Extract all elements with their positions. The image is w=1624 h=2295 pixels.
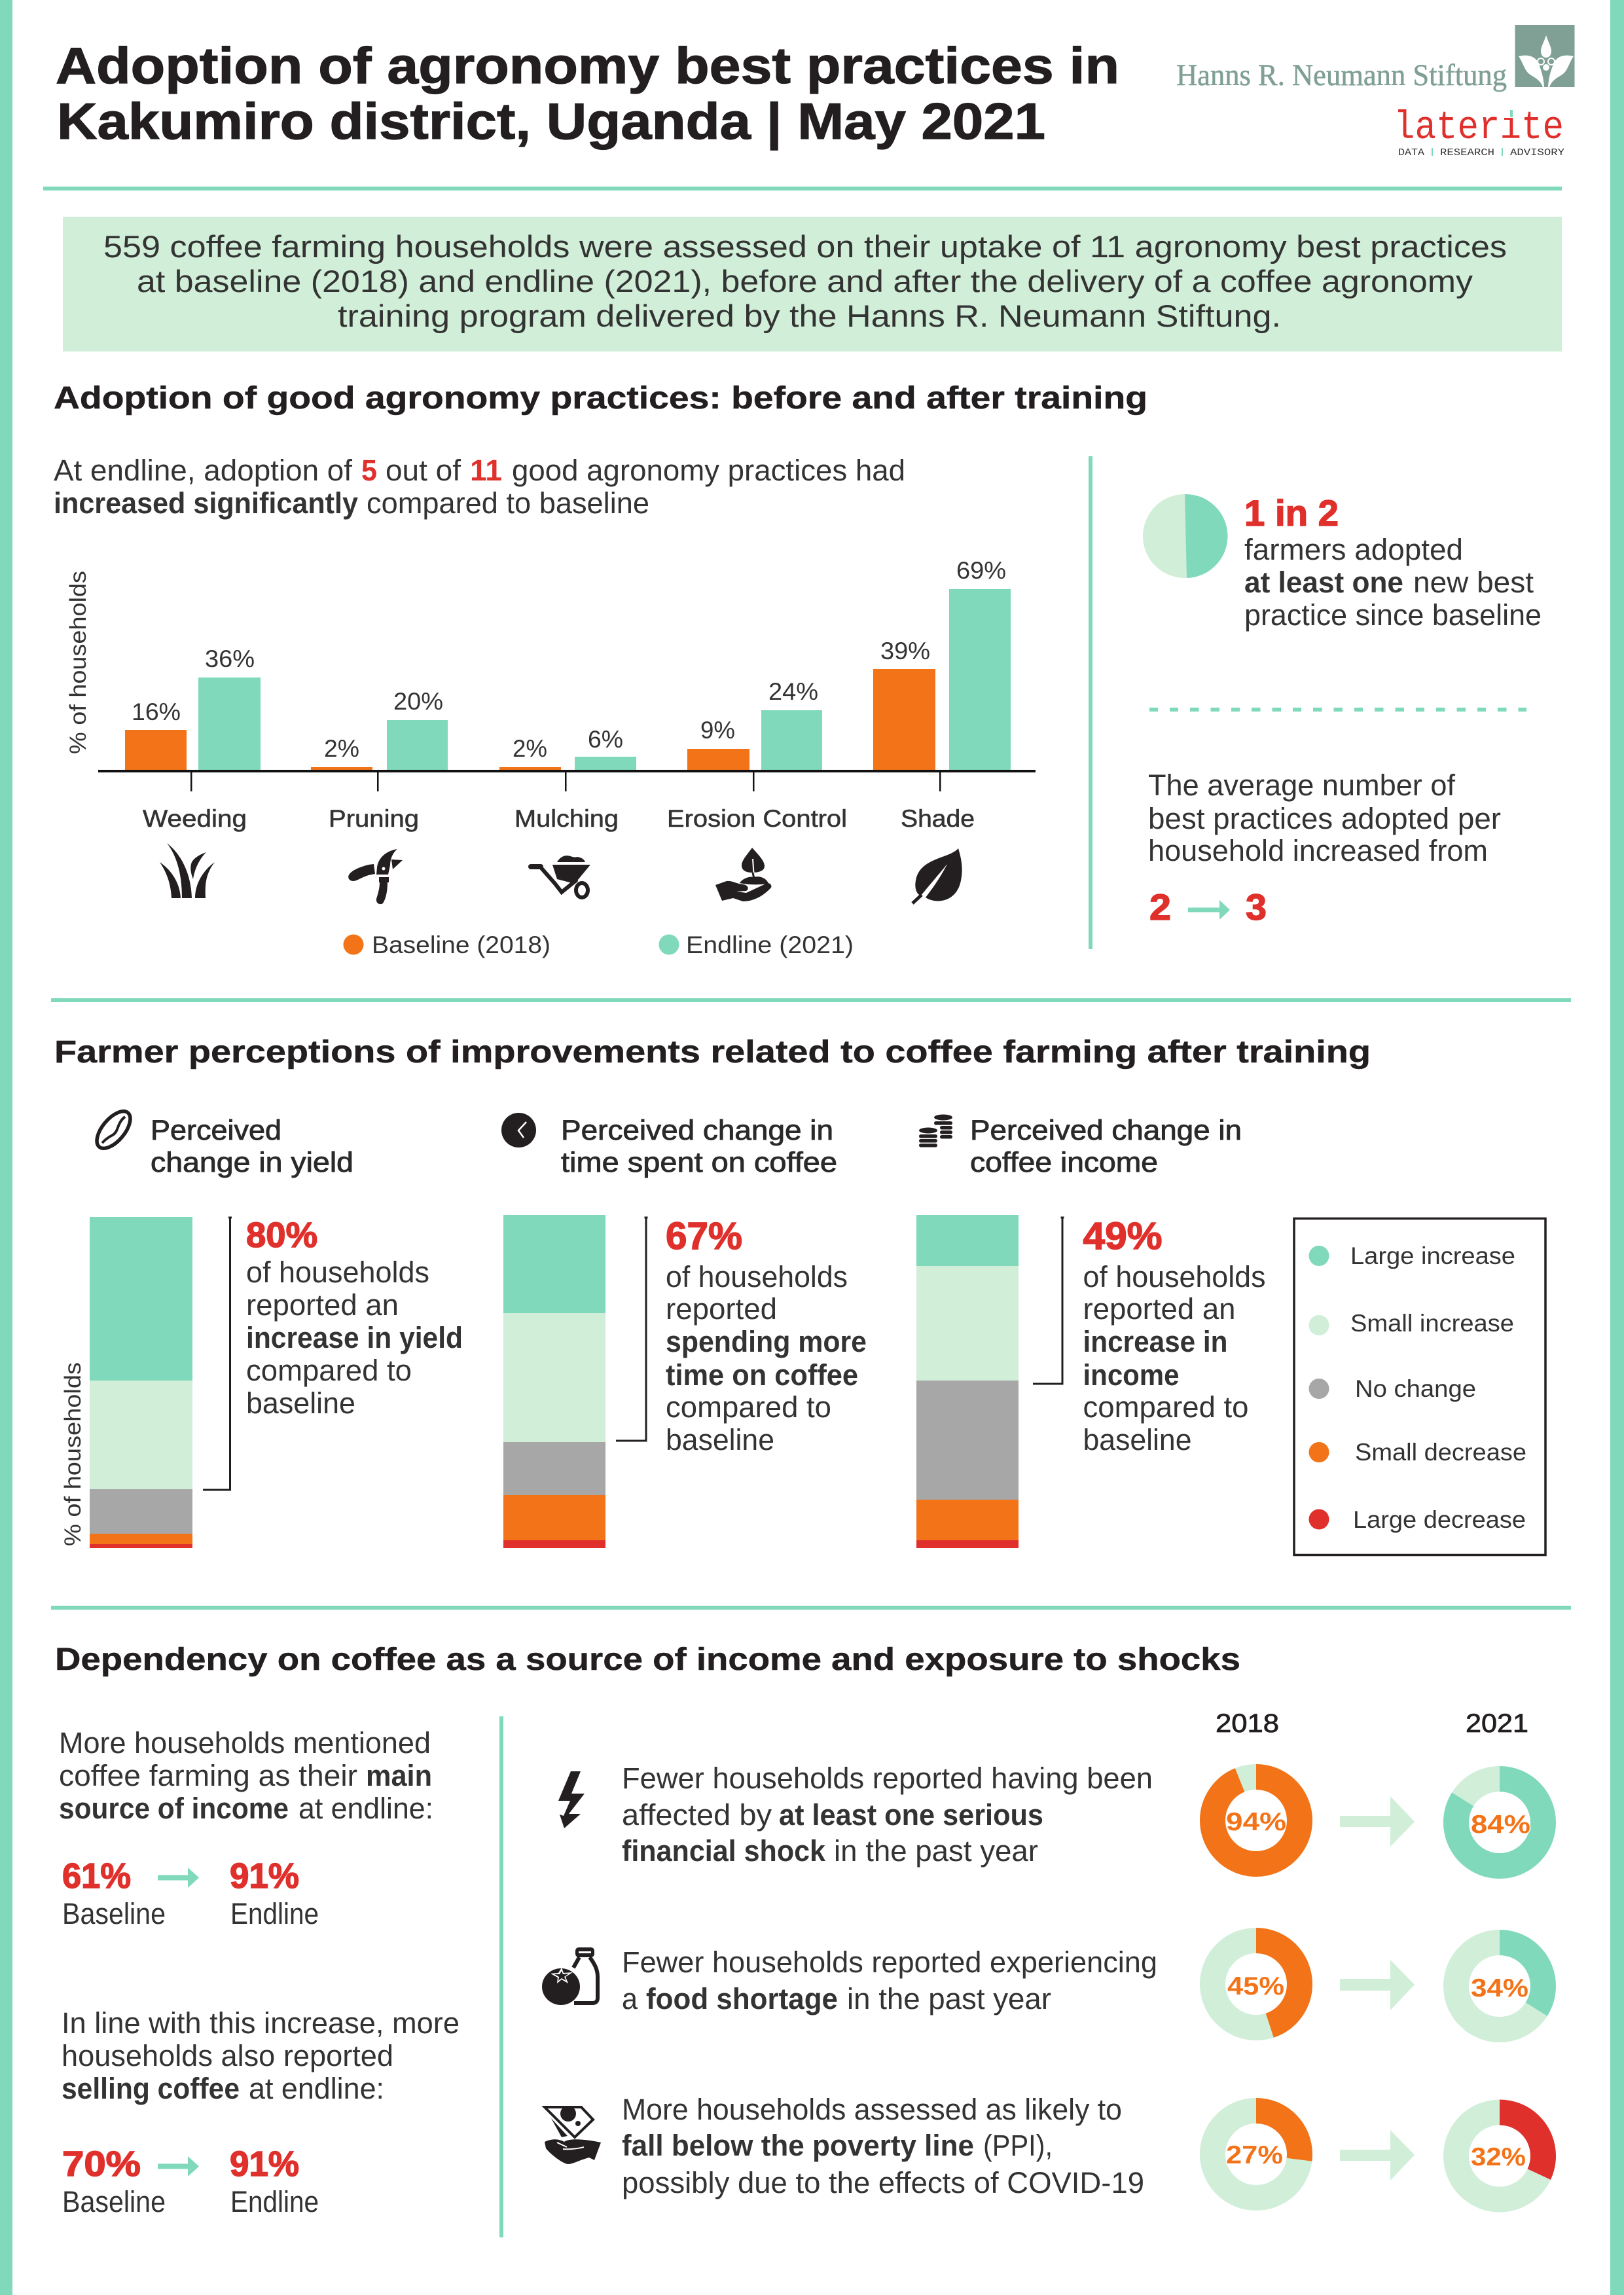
callout: 67% — [666, 1215, 867, 1456]
callout: 49%: baseline — [1083, 1423, 1191, 1456]
text block: possibly due to the effects of COVID-19 — [622, 2166, 1144, 2199]
panel: average number of best practices: 3 — [1246, 886, 1267, 928]
panel: main source of income: coffee farming as their — [59, 1759, 357, 1792]
subheading — [151, 1115, 353, 1178]
legend: baseline and endline — [343, 931, 854, 958]
text block: in the past year — [847, 1982, 1051, 2015]
icon: coins — [919, 1114, 952, 1147]
panel: average number of best practices — [1148, 768, 1501, 928]
bars: erosion control: 24% — [768, 678, 818, 705]
row: food shortage — [542, 1940, 1543, 2029]
logo: laterite: RESEARCH — [1440, 147, 1494, 158]
text block: fall below the poverty line — [622, 2129, 974, 2162]
callout: 80%: 80% — [246, 1216, 317, 1255]
pie chart — [1143, 494, 1227, 578]
panel: main source of income: More households mentioned — [59, 1726, 431, 1760]
panel: selling coffee: In line with this increase, more — [62, 2006, 460, 2040]
panel: main source of income — [59, 1726, 433, 1930]
icon: grass — [160, 843, 215, 898]
legend: baseline and endline: Baseline (2018) — [372, 931, 550, 958]
text block: Fewer households reported having been — [622, 1762, 1153, 1795]
callout: 67%: spending more — [666, 1325, 867, 1358]
callout: 80%: reported an — [246, 1288, 399, 1322]
title: Kakumiro district, Uganda | May 2021 — [57, 92, 1045, 150]
logo: laterite: DATA — [1398, 147, 1424, 158]
donut: 2021 84% — [1456, 1779, 1543, 1866]
legend: perceived change: Small increase — [1350, 1310, 1514, 1337]
panel: perceived change in time spent — [501, 1113, 867, 1548]
panel: 1 in 2 farmers: at least one — [1244, 566, 1403, 599]
stacked bar — [916, 1215, 1019, 1548]
icon: pruning shears — [348, 849, 403, 904]
donut: 2018 27% — [1212, 2110, 1300, 2198]
heading: adoption of good agronomy practices: Adoption of good agronomy practices: before and after training — [54, 381, 1147, 416]
row: poverty line — [545, 2093, 1543, 2199]
subheading: change in yield — [151, 1147, 353, 1178]
subheading: Perceived — [151, 1115, 281, 1146]
panel: 1 in 2 farmers: farmers adopted — [1244, 533, 1463, 566]
bars: weeding: 16% — [132, 698, 181, 725]
panel: selling coffee: selling coffee — [62, 2072, 240, 2105]
stacked bar — [503, 1215, 605, 1548]
donut: 2018 94%: 94% — [1226, 1808, 1286, 1836]
panel: main source of income: 61% — [62, 1856, 131, 1896]
panel: main source of income: source of income — [59, 1792, 289, 1825]
arrow — [1340, 1960, 1415, 2010]
donut: 2021 34%: 34% — [1471, 1974, 1528, 2002]
donut: 2018 45%: 45% — [1227, 1972, 1284, 2000]
heading: farmer perceptions: Farmer perceptions of improvements related to coffee farming after training — [54, 1035, 1371, 1070]
bars: shade: 69% — [956, 557, 1006, 584]
panel: perceived change in yield — [60, 1106, 463, 1548]
callout: 49%: reported an — [1083, 1292, 1236, 1326]
bars: shade: 39% — [880, 638, 930, 664]
text block: adoption summary: out of — [386, 454, 461, 487]
panel: selling coffee: at endline: — [249, 2072, 384, 2105]
icon: clock — [501, 1113, 536, 1148]
intro panel: at baseline (2018) and endline (2021), before and after the delivery of a coffee agronomy — [137, 264, 1473, 298]
intro panel — [63, 217, 1562, 352]
bars: weeding: 36% — [205, 645, 255, 672]
legend: perceived change: Small decrease — [1355, 1439, 1526, 1466]
year headings — [1216, 1709, 1528, 1738]
bracket — [203, 1218, 232, 1490]
text block: at least one serious — [779, 1798, 1043, 1832]
donut: 2021 32% — [1456, 2112, 1543, 2199]
text block: adoption summary: compared to baseline — [367, 486, 649, 520]
bars: erosion control — [687, 678, 822, 771]
donut: 2021 84%: 84% — [1471, 1811, 1530, 1839]
panel: selling coffee: Endline — [230, 2185, 319, 2218]
panel: selling coffee: households also reported — [62, 2039, 393, 2072]
bars: erosion control: 9% — [700, 717, 735, 744]
arrow — [158, 2156, 199, 2177]
stacked bar — [90, 1217, 192, 1548]
text block: More households assessed as likely to — [622, 2093, 1122, 2126]
panel: average number of best practices: best practices adopted per — [1148, 802, 1501, 835]
callout: 80%: of households — [246, 1256, 429, 1289]
panel: 1 in 2 farmers — [1143, 492, 1542, 632]
callout: 80%: baseline — [246, 1386, 355, 1420]
text block: (PPI), — [983, 2129, 1053, 2162]
icon: hand receiving money — [545, 2106, 601, 2164]
category labels: Shade — [901, 805, 975, 832]
legend: perceived change — [1294, 1219, 1545, 1555]
callout: 80%: increase in yield — [246, 1321, 463, 1354]
category labels: Weeding — [143, 805, 247, 832]
text block: adoption summary — [54, 454, 905, 520]
text block: adoption summary: 5 — [361, 454, 377, 487]
text block: adoption summary: At endline, adoption of — [54, 454, 352, 487]
bracket — [616, 1218, 648, 1441]
callout: 67%: compared to — [666, 1390, 831, 1424]
panel: 1 in 2 farmers: new best — [1413, 566, 1534, 599]
panel: selling coffee: 70% — [62, 2144, 141, 2184]
subheading — [561, 1115, 837, 1178]
callout: 49%: of households — [1083, 1260, 1266, 1293]
legend: perceived change: Large increase — [1350, 1242, 1515, 1269]
donut: 2021 34% — [1456, 1943, 1543, 2029]
arrow — [1188, 900, 1230, 920]
year headings: 2021 — [1466, 1709, 1528, 1738]
subheading: coffee income — [970, 1147, 1158, 1178]
bars: mulching: 6% — [588, 726, 623, 753]
bars: mulching — [499, 726, 636, 771]
callout: 80% — [246, 1216, 463, 1420]
arrow — [158, 1868, 199, 1888]
year headings: 2018 — [1216, 1709, 1279, 1738]
callout: 67%: of households — [666, 1260, 848, 1293]
panel: main source of income: Endline — [230, 1897, 319, 1930]
callout: 67%: time on coffee — [666, 1358, 858, 1392]
logo: laterite: ADVISORY — [1510, 147, 1564, 158]
callout: 67%: reported — [666, 1292, 777, 1326]
subheading — [970, 1115, 1242, 1178]
panel: main source of income: main — [366, 1759, 432, 1792]
donut: 2018 94% — [1212, 1777, 1300, 1864]
y-axis label: % of households — [65, 571, 91, 754]
panel: perceived change in income — [916, 1114, 1266, 1548]
category labels: Mulching — [514, 805, 619, 832]
text block — [622, 1945, 1157, 2015]
row: financial shock — [558, 1762, 1543, 1868]
callout: 67%: 67% — [666, 1215, 742, 1257]
bars: shade — [873, 557, 1011, 771]
donut: 2021 32%: 32% — [1471, 2143, 1526, 2171]
panel: selling coffee — [62, 2006, 460, 2218]
callout: 49%: 49% — [1083, 1215, 1163, 1257]
panel: 1 in 2 farmers: 1 in 2 — [1244, 492, 1339, 533]
category labels — [143, 805, 975, 832]
bars: pruning — [311, 688, 448, 771]
panel: main source of income: Baseline — [62, 1897, 166, 1930]
category labels: Erosion Control — [667, 805, 847, 832]
bars: pruning: 2% — [324, 735, 359, 762]
logo: laterite: laterite — [1394, 106, 1564, 151]
bars: weeding — [125, 645, 261, 771]
donut: 2018 45% — [1212, 1940, 1300, 2028]
icon: lightning bolt — [558, 1771, 585, 1828]
category labels: Pruning — [329, 805, 419, 832]
panel: average number of best practices: The average number of — [1148, 768, 1455, 802]
callout: 49%: income — [1083, 1358, 1180, 1392]
text block: Fewer households reported experiencing — [622, 1945, 1157, 1979]
bars: pruning: 20% — [393, 688, 443, 715]
callout: 49%: increase in — [1083, 1325, 1228, 1358]
panel: selling coffee: 91% — [230, 2144, 299, 2184]
subheading: Perceived change in — [970, 1115, 1242, 1146]
heading: dependency on coffee: Dependency on coffee as a source of income and exposure to shocks — [55, 1642, 1240, 1677]
legend: baseline and endline: Endline (2021) — [686, 931, 854, 958]
bracket — [1033, 1218, 1064, 1384]
icon: leaf — [912, 848, 962, 903]
text block — [622, 2093, 1144, 2199]
arrow — [1340, 1796, 1415, 1847]
icon: wheelbarrow — [531, 856, 590, 897]
text block: adoption summary: 11 — [470, 454, 502, 487]
panel: selling coffee: Baseline — [62, 2185, 166, 2218]
subheading: time spent on coffee — [561, 1147, 837, 1178]
icon: hand with seedling — [715, 848, 771, 901]
icon: tomato and bottle — [542, 1947, 598, 2005]
intro panel: training program delivered by the Hanns R. Neumann Stiftung. — [338, 298, 1281, 333]
text block: in the past year — [834, 1834, 1038, 1868]
callout: 67%: baseline — [666, 1423, 774, 1456]
text block: affected by — [622, 1798, 772, 1832]
panel: average number of best practices: 2 — [1149, 886, 1171, 928]
donut: 2018 27%: 27% — [1226, 2141, 1283, 2169]
title: Adoption of agronomy best practices in — [56, 37, 1119, 94]
arrow — [1340, 2130, 1415, 2180]
text block: a — [622, 1982, 638, 2015]
legend: perceived change: Large decrease — [1353, 1506, 1526, 1533]
bar chart: adoption by practice — [65, 557, 1036, 832]
bars: mulching: 2% — [513, 735, 547, 762]
text block: food shortage — [646, 1982, 838, 2015]
text block: adoption summary: good agronomy practices had — [512, 454, 905, 487]
callout: 80%: compared to — [246, 1354, 412, 1387]
logo: Hanns R. Neumann Stiftung: Hanns R. Neumann Stiftung — [1176, 58, 1507, 92]
text block: adoption summary: increased significantly — [54, 486, 358, 520]
callout: 49% — [1083, 1215, 1266, 1456]
logo: Hanns R. Neumann Stiftung — [1176, 25, 1575, 92]
panel: main source of income: at endline: — [298, 1792, 433, 1825]
panel: 1 in 2 farmers: practice since baseline — [1244, 598, 1542, 632]
subheading: Perceived change in — [561, 1115, 833, 1146]
intro panel: 559 coffee farming households were assessed on their uptake of 11 agronomy best practices — [103, 229, 1507, 264]
y-axis label: % of households — [60, 1362, 86, 1546]
panel: main source of income: 91% — [230, 1856, 299, 1896]
title — [56, 37, 1119, 150]
text block — [622, 1762, 1153, 1868]
callout: 49%: compared to — [1083, 1390, 1249, 1424]
text block: financial shock — [622, 1834, 826, 1868]
icon: coffee bean — [91, 1106, 136, 1154]
legend: perceived change: No change — [1355, 1375, 1476, 1402]
panel: average number of best practices: household increased from — [1148, 834, 1488, 867]
